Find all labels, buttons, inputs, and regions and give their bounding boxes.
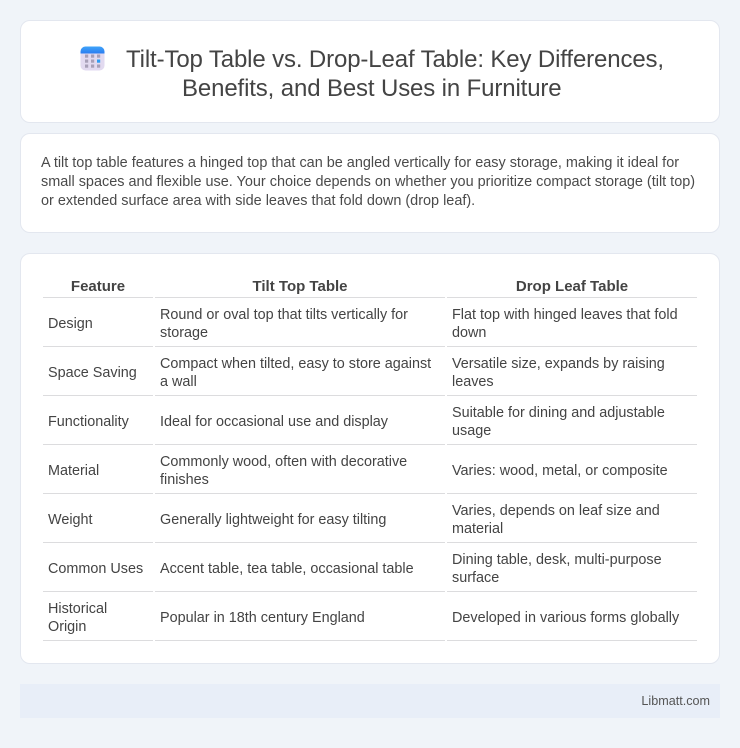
- comparison table: Compact when tilted, easy to store against: [160, 356, 431, 372]
- title: Benefits, and Best Uses in Furniture: [182, 75, 562, 102]
- comparison table: Drop Leaf Table: [516, 278, 628, 295]
- comparison table: Historical: [48, 601, 107, 617]
- comparison table: material: [452, 521, 503, 537]
- intro text: [41, 155, 695, 209]
- comparison table: Popular in 18th century England: [160, 610, 365, 626]
- comparison table: leaves: [452, 374, 494, 390]
- comparison table: [43, 278, 697, 641]
- comparison table: Weight: [48, 512, 93, 528]
- footer bar: [20, 684, 720, 718]
- comparison table: finishes: [160, 472, 209, 488]
- comparison table: Origin: [48, 619, 86, 635]
- comparison table: Commonly wood, often with decorative: [160, 454, 407, 470]
- intro text: A tilt top table features a hinged top that can be angled vertically for easy storage, making it ideal for: [41, 155, 679, 171]
- comparison table: Generally lightweight for easy tilting: [160, 512, 386, 528]
- panel: comparison table card: [20, 253, 720, 664]
- comparison table: Flat top with hinged leaves that fold: [452, 307, 678, 323]
- comparison table: Dining table, desk, multi-purpose: [452, 552, 662, 568]
- intro text: or extended surface area with side leaves that fold down (drop leaf).: [41, 193, 475, 209]
- comparison table: Suitable for dining and adjustable: [452, 405, 665, 421]
- comparison table: Feature: [71, 278, 125, 295]
- comparison table: Varies, depends on leaf size and: [452, 503, 660, 519]
- comparison table: usage: [452, 423, 491, 439]
- panel: introduction card: [20, 133, 720, 233]
- icon: calendar: [80, 46, 104, 70]
- comparison table: down: [452, 325, 486, 341]
- comparison table: Functionality: [48, 414, 129, 430]
- comparison table: Space Saving: [48, 365, 137, 381]
- panel: title card: [20, 20, 720, 123]
- comparison table: storage: [160, 325, 208, 341]
- comparison table: surface: [452, 570, 499, 586]
- footer text: Libmatt.com: [641, 694, 710, 708]
- comparison table: Varies: wood, metal, or composite: [452, 463, 668, 479]
- comparison table: Design: [48, 316, 93, 332]
- comparison table: Versatile size, expands by raising: [452, 356, 665, 372]
- intro text: small spaces and flexible use. Your choice depends on whether you prioritize compact storage (tilt top): [41, 174, 695, 190]
- comparison table: a wall: [160, 374, 197, 390]
- comparison table: Developed in various forms globally: [452, 610, 679, 626]
- comparison table: Tilt Top Table: [252, 278, 348, 295]
- comparison table: Round or oval top that tilts vertically for: [160, 307, 408, 323]
- comparison table: Material: [48, 463, 99, 479]
- comparison table: Accent table, tea table, occasional table: [160, 561, 414, 577]
- title: [126, 46, 664, 102]
- title: Tilt-Top Table vs. Drop-Leaf Table: Key Differences,: [126, 46, 664, 73]
- comparison table: Common Uses: [48, 561, 143, 577]
- comparison table: Ideal for occasional use and display: [160, 414, 388, 430]
